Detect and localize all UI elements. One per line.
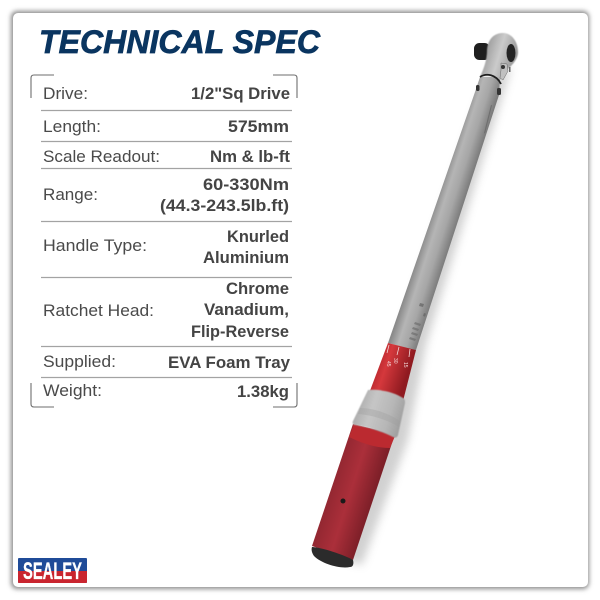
spec table bbox=[31, 75, 297, 407]
row: weight: Weight: bbox=[43, 382, 102, 400]
row: scale readout bbox=[43, 148, 291, 166]
row: handle type: Aluminium bbox=[203, 249, 289, 267]
row: scale readout: Scale Readout: bbox=[43, 148, 160, 166]
row: weight: 1.38kg bbox=[237, 383, 289, 401]
row: handle type bbox=[43, 228, 289, 267]
row: ratchet head: Flip-Reverse bbox=[191, 323, 289, 341]
row: ratchet head: Vanadium, bbox=[204, 301, 289, 319]
row: range: 60-330Nm bbox=[203, 176, 289, 194]
scale ticks and numbers: 45 bbox=[385, 361, 391, 367]
end cap bbox=[312, 547, 353, 567]
grey shaft bbox=[388, 77, 500, 350]
handle neck bbox=[349, 424, 395, 448]
ratchet head bbox=[480, 33, 518, 80]
row: handle type: Handle Type: bbox=[43, 237, 147, 255]
red scale section bbox=[368, 343, 416, 405]
row: weight bbox=[43, 382, 289, 401]
row: ratchet head: Chrome bbox=[226, 280, 289, 298]
scale ticks and numbers: 15 bbox=[402, 362, 408, 368]
red handle bbox=[312, 424, 395, 560]
logo: sealey bbox=[18, 558, 87, 585]
row: supplied: EVA Foam Tray bbox=[168, 354, 291, 372]
row dividers bbox=[41, 110, 292, 378]
row: supplied bbox=[43, 353, 291, 372]
torque wrench bbox=[312, 33, 518, 567]
silver collar bbox=[353, 390, 405, 438]
row: scale readout: Nm & lb-ft bbox=[210, 148, 291, 166]
row: length: Length: bbox=[43, 118, 101, 136]
scale ticks and numbers bbox=[385, 345, 410, 368]
handle hole bbox=[340, 498, 346, 504]
title: TECHNICAL SPEC bbox=[39, 24, 321, 60]
scale markings on shaft bbox=[409, 105, 492, 341]
row: ratchet head bbox=[43, 280, 289, 341]
collar ring and pins bbox=[476, 75, 501, 95]
row: supplied: Supplied: bbox=[43, 353, 116, 371]
table frame brackets bbox=[31, 75, 297, 407]
collar band shade bbox=[358, 408, 400, 427]
row: length: 575mm bbox=[228, 118, 289, 136]
square drive bbox=[506, 44, 516, 62]
row: drive bbox=[43, 85, 290, 103]
row: range bbox=[43, 176, 289, 215]
row: drive: Drive: bbox=[43, 85, 88, 103]
flip-reverse pawl bbox=[500, 63, 510, 80]
wrench soft shadow bbox=[345, 65, 512, 565]
row: length bbox=[43, 118, 289, 136]
ratchet knob bbox=[474, 43, 490, 60]
scale ticks and numbers: 30 bbox=[392, 358, 398, 364]
row: range: (44.3-243.5lb.ft) bbox=[160, 197, 289, 215]
row: handle type: Knurled bbox=[227, 228, 289, 246]
row: ratchet head: Ratchet Head: bbox=[43, 302, 154, 320]
row: drive: 1/2"Sq Drive bbox=[191, 85, 290, 103]
logo: sealey: SEALEY bbox=[23, 558, 82, 585]
row: range: Range: bbox=[43, 186, 98, 204]
